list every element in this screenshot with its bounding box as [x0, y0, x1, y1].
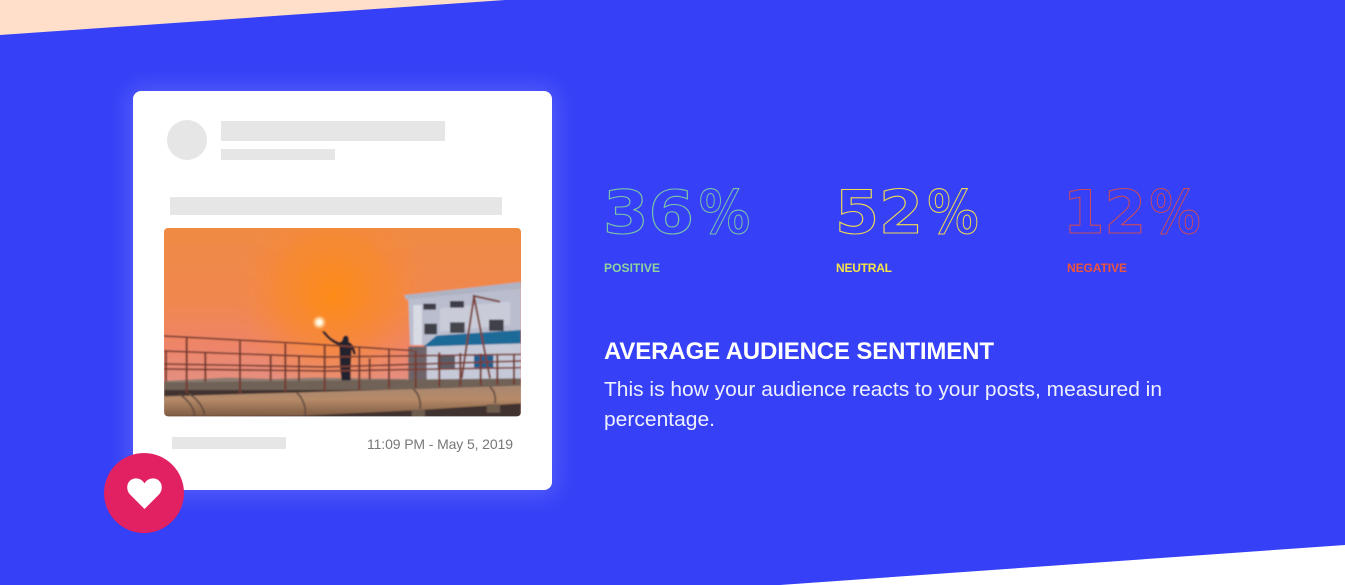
icon: heart badge	[104, 453, 184, 533]
panel: post card	[127, 86, 558, 497]
value 52%: %	[928, 178, 978, 248]
person	[322, 331, 356, 381]
crane	[462, 296, 500, 378]
top left peach corner	[0, 0, 505, 35]
value 36%	[603, 178, 750, 248]
stat: neutral	[835, 178, 978, 275]
handle placeholder	[221, 149, 335, 160]
post text placeholder	[170, 197, 502, 215]
value 12%	[1063, 178, 1200, 248]
value 12%: %	[1150, 178, 1200, 248]
heading: AVERAGE AUDIENCE SENTIMENT	[604, 338, 994, 365]
label neutral: NEUTRAL	[836, 261, 892, 275]
value 12%: 12	[1063, 178, 1146, 248]
description	[604, 379, 1162, 431]
wall	[164, 378, 521, 392]
stat: negative	[1063, 178, 1200, 275]
timestamp: 11:09 PM - May 5, 2019	[367, 436, 513, 452]
stat: positive	[603, 178, 750, 275]
ground under pipe	[164, 390, 521, 418]
name placeholder	[221, 121, 445, 141]
label negative: NEGATIVE	[1067, 261, 1127, 275]
building	[407, 288, 521, 346]
value 36%: %	[699, 178, 750, 248]
label positive: POSITIVE	[604, 261, 660, 275]
pipe	[164, 386, 521, 416]
value 52%	[835, 178, 978, 248]
avatar placeholder	[167, 120, 207, 160]
railing	[164, 336, 521, 371]
description: This is how your audience reacts to your posts, measured in	[604, 379, 1162, 401]
photo: sunset	[160, 225, 527, 420]
value 36%: 36	[603, 178, 694, 248]
description: percentage.	[604, 409, 715, 431]
bottom right white corner	[780, 545, 1345, 585]
sun	[314, 317, 325, 328]
value 52%: 52	[835, 178, 923, 248]
footer placeholder	[172, 437, 286, 449]
